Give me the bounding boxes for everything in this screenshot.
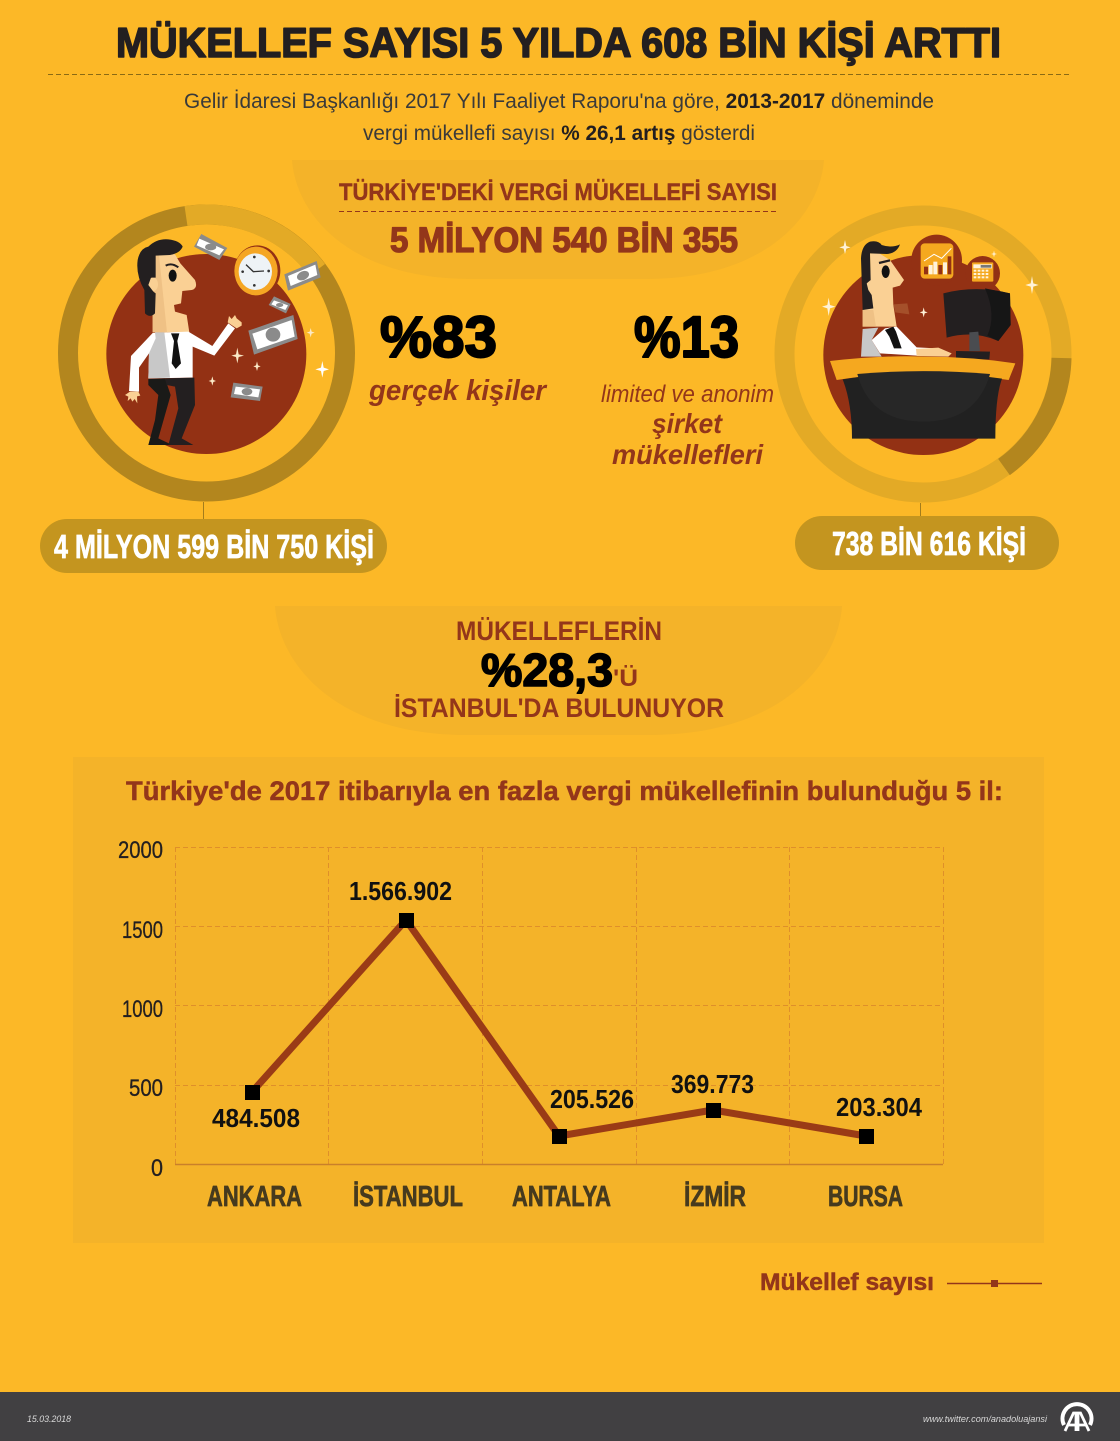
source url: www.twitter.com/anadoluajansi (923, 1414, 1048, 1424)
man figure (125, 239, 242, 445)
icon: computer monitor (943, 288, 1011, 359)
total taxpayers heading: TÜRKİYE'DEKİ VERGİ MÜKELLEFİ SAYISI (339, 179, 777, 206)
stat: individuals share: gerçek kişiler (368, 375, 548, 407)
date: 15.03.2018 (27, 1414, 71, 1424)
stat: company share: mükellefleri (612, 439, 764, 470)
panel: Istanbul share: İSTANBUL'DA BULUNUYOR (394, 693, 724, 723)
x axis labels: İZMİR (684, 1181, 746, 1213)
y axis labels: 1000 (122, 996, 163, 1023)
icon: AA logo (1062, 1404, 1092, 1431)
x axis labels: ANTALYA (512, 1181, 611, 1213)
Istanbul percentage: %28,3 (481, 644, 613, 696)
ring chart: individuals (68, 214, 345, 492)
stat: individuals share: %83 (380, 305, 497, 370)
pill: individuals count: 4 MİLYON 599 BİN 750 KİŞİ (54, 528, 374, 565)
stat: individuals share (368, 305, 548, 407)
panel: Istanbul share (275, 606, 842, 735)
pill: individuals count (40, 502, 387, 573)
y axis labels: 2000 (118, 837, 163, 864)
icon: calculator badge (965, 256, 1000, 291)
chart heading: Türkiye'de 2017 itibarıyla en fazla vergi mükellefinin bulunduğu 5 il: (126, 776, 1003, 806)
footer bar (0, 1392, 1120, 1441)
panel: Istanbul share: 'Ü (613, 665, 638, 692)
data labels (212, 876, 922, 1133)
legend (760, 1269, 1042, 1296)
y axis labels: 1500 (122, 917, 163, 944)
intro text: vergi mükellefi sayısı % 26,1 artış gösterdi (363, 122, 755, 145)
illustration: man at desk (822, 235, 1039, 455)
panel: Istanbul share: MÜKELLEFLERİN (456, 616, 662, 646)
data labels: 205.526 (550, 1084, 634, 1114)
icon: banknotes (194, 234, 321, 401)
icon: bar chart badge (911, 235, 962, 285)
intro text (184, 90, 934, 145)
data labels: 1.566.902 (349, 876, 452, 906)
x axis labels: BURSA (828, 1181, 903, 1213)
panel: total taxpayers (292, 160, 824, 279)
pill: companies count (795, 503, 1059, 570)
data markers (245, 913, 874, 1144)
stat: company share: şirket (652, 408, 724, 439)
stat: company share: limited ve anonim (601, 381, 774, 408)
x axis labels: İSTANBUL (353, 1181, 463, 1213)
data labels: 484.508 (212, 1103, 300, 1133)
icon: sparkles (209, 328, 329, 386)
data labels: 203.304 (836, 1092, 922, 1122)
total taxpayers value: 5 MİLYON 540 BİN 355 (390, 221, 738, 260)
y axis labels (118, 837, 163, 1182)
data labels: 369.773 (671, 1069, 754, 1099)
data line (252, 920, 866, 1136)
title: MÜKELLEF SAYISI 5 YILDA 608 BİN KİŞİ ARTTI (116, 19, 1001, 66)
x axis labels (207, 1181, 903, 1213)
panel: line chart (73, 757, 1044, 1243)
icon: clock (234, 245, 280, 296)
stat: company share: %13 (634, 305, 739, 370)
man figure at desk (861, 241, 952, 357)
desk (830, 356, 1015, 439)
pill: companies count: 738 BİN 616 KİŞİ (832, 525, 1026, 562)
legend: Mükellef sayısı (760, 1269, 934, 1296)
illustration: man with money (106, 234, 329, 454)
x axis labels: ANKARA (207, 1181, 302, 1213)
icon: sparkles (822, 240, 1039, 317)
y axis labels: 0 (151, 1155, 163, 1182)
ring chart: companies (784, 216, 1062, 492)
intro text: Gelir İdaresi Başkanlığı 2017 Yılı Faaliyet Raporu'na göre, 2013-2017 döneminde (184, 90, 934, 113)
y axis labels: 500 (129, 1075, 163, 1102)
stat: company share (601, 305, 774, 470)
